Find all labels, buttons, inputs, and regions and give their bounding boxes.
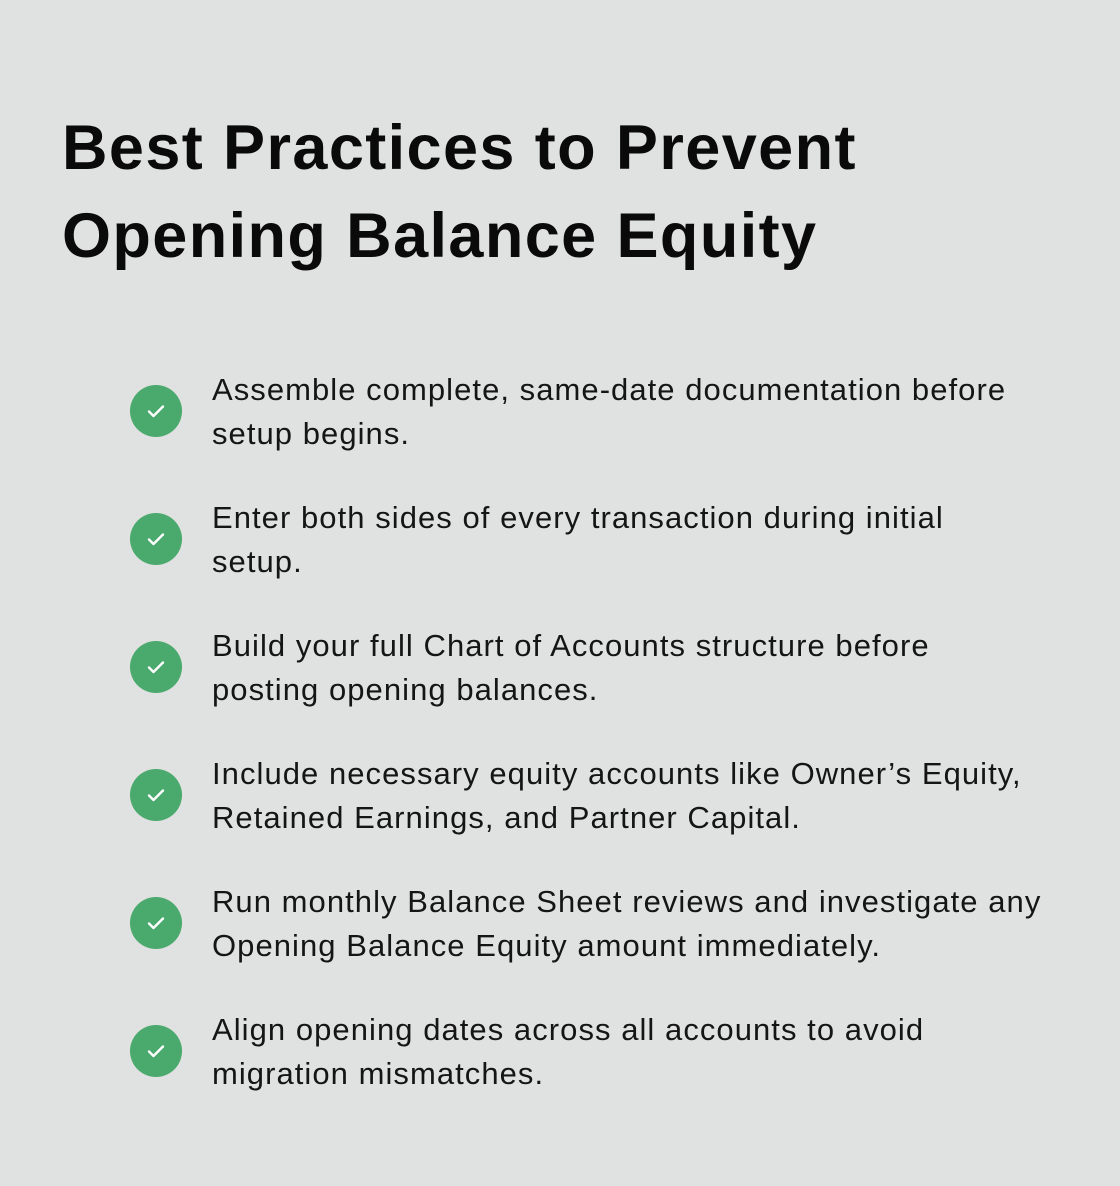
icon: check	[130, 1025, 182, 1077]
item 4	[130, 756, 1022, 835]
text: migration mismatches.	[212, 1056, 544, 1091]
title: Opening Balance Equity	[62, 201, 817, 271]
item 1	[130, 372, 1006, 451]
text: Opening Balance Equity amount immediately.	[212, 928, 881, 963]
item 5	[130, 884, 1041, 963]
item 3	[130, 628, 930, 707]
text: Enter both sides of every transaction during initial	[212, 500, 944, 535]
item 2	[130, 500, 944, 579]
icon: check	[130, 641, 182, 693]
text	[212, 628, 930, 707]
text: Build your full Chart of Accounts structure before	[212, 628, 930, 663]
text	[212, 884, 1041, 963]
text	[212, 1012, 924, 1091]
text: Run monthly Balance Sheet reviews and investigate any	[212, 884, 1041, 919]
text: setup.	[212, 544, 303, 579]
icon: check	[130, 513, 182, 565]
text: Include necessary equity accounts like Owner’s Equity,	[212, 756, 1022, 791]
text: Align opening dates across all accounts to avoid	[212, 1012, 924, 1047]
text	[212, 372, 1006, 451]
icon: check	[130, 385, 182, 437]
text	[212, 500, 944, 579]
icon: check	[130, 897, 182, 949]
icon: check	[130, 769, 182, 821]
text	[212, 756, 1022, 835]
title: Best Practices to Prevent	[62, 113, 857, 183]
item 6	[130, 1012, 924, 1091]
text: setup begins.	[212, 416, 410, 451]
text: Retained Earnings, and Partner Capital.	[212, 800, 801, 835]
text: Assemble complete, same-date documentation before	[212, 372, 1006, 407]
text: posting opening balances.	[212, 672, 598, 707]
title	[62, 113, 857, 271]
